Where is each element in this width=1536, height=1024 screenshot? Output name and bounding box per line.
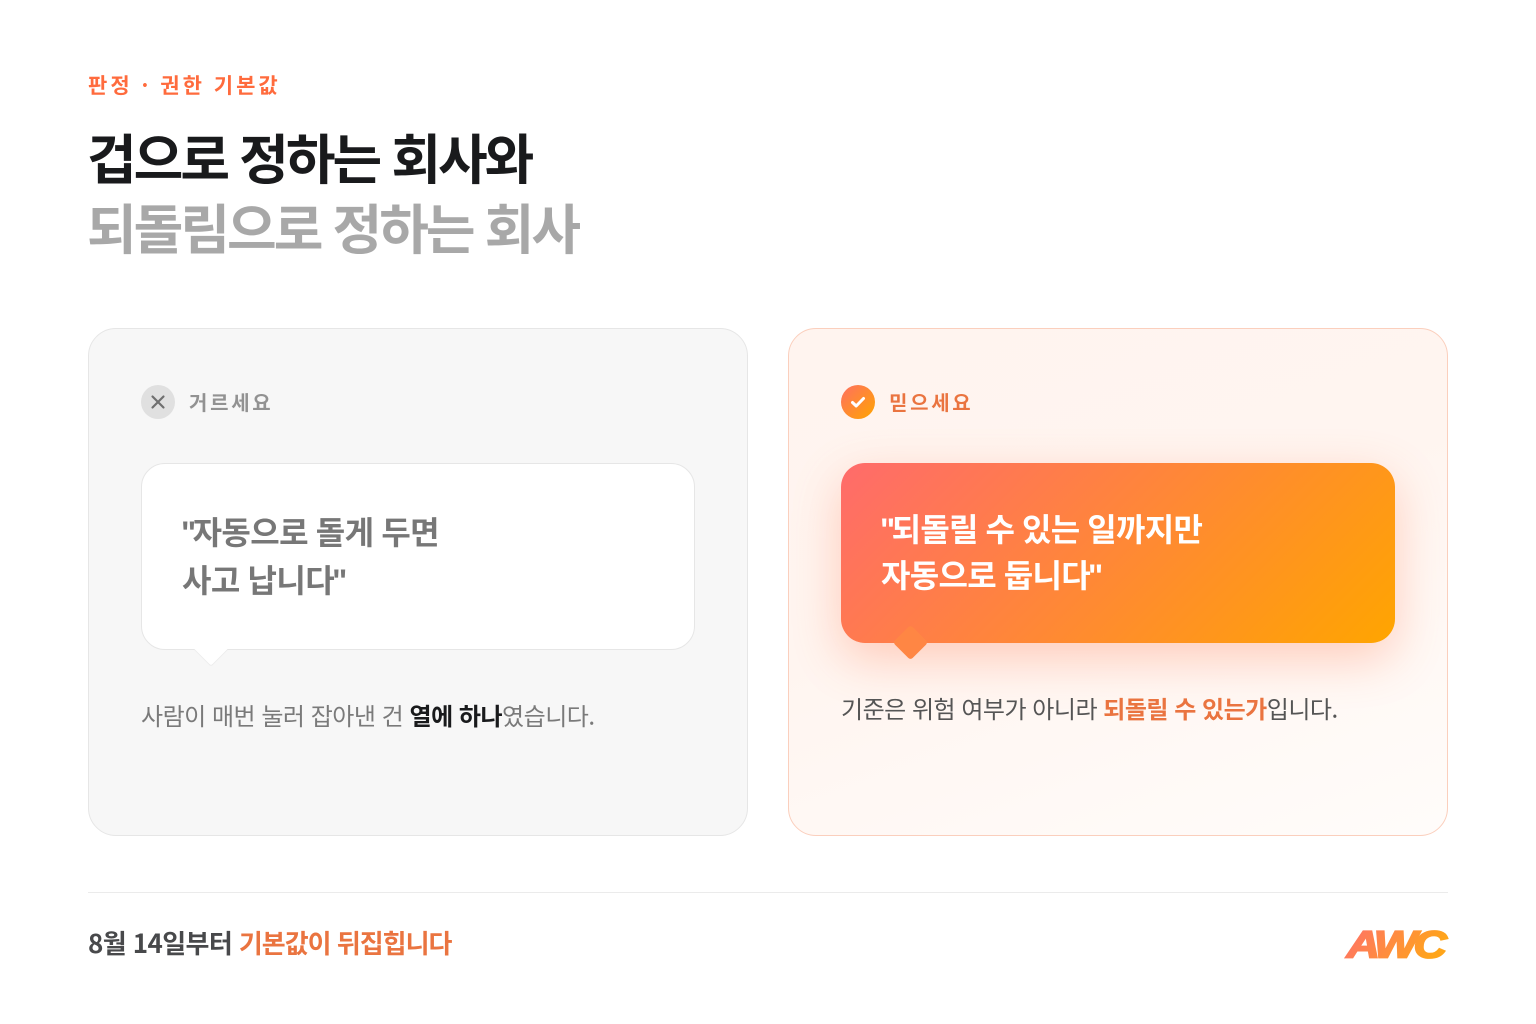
caption: trust: 기준은 위험 여부가 아니라 되돌릴 수 있는가입니다. [841, 690, 1338, 725]
panel: reject [88, 328, 748, 836]
bubble tail [893, 625, 928, 660]
quote text: 사고 납니다" [182, 556, 347, 602]
caption: reject: 사람이 매번 눌러 잡아낸 건 열에 하나였습니다. [141, 697, 595, 732]
icon: check mark [841, 385, 875, 419]
quote text [880, 505, 1202, 597]
icon: x mark [141, 385, 175, 419]
bubble tail [194, 633, 228, 667]
quote text: 자동으로 둡니다" [881, 551, 1102, 597]
title line 2: 되돌림으로 정하는 회사 [87, 186, 578, 265]
quote text: "자동으로 돌게 두면 [181, 508, 439, 554]
label: reject: 거르세요 [189, 387, 273, 416]
title [87, 116, 580, 265]
eyebrow label: 판정 · 권한 기본값 [88, 70, 281, 100]
speech bubble: trust quote [841, 463, 1395, 643]
speech bubble: reject quote [141, 463, 695, 650]
quote text [181, 508, 439, 602]
panel: trust [788, 328, 1448, 836]
logo: AWC: AWC [1346, 923, 1447, 966]
label: trust: 믿으세요 [889, 387, 973, 416]
quote text: "되돌릴 수 있는 일까지만 [880, 505, 1202, 551]
footer text: 8월 14일부터 기본값이 뒤집힙니다 [88, 924, 451, 961]
title line 1: 겁으로 정하는 회사와 [87, 116, 531, 195]
